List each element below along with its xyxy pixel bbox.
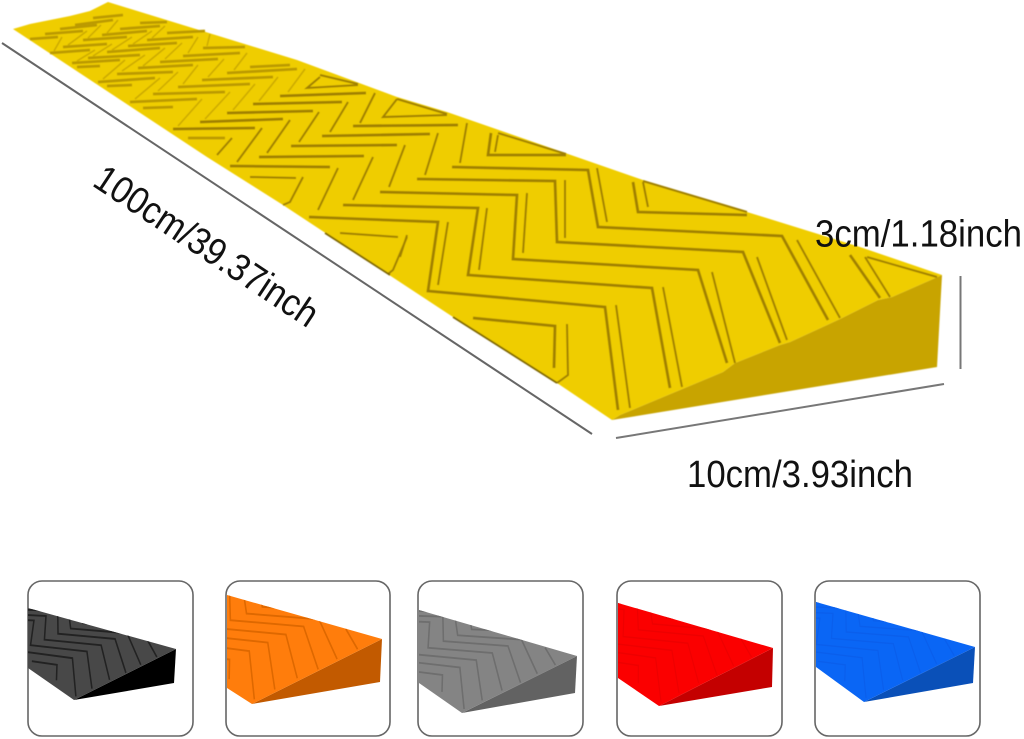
swatch: blue ramp (814, 580, 981, 737)
main yellow ramp (13, 2, 942, 420)
ramp top surface (13, 2, 942, 420)
height dimension line (960, 276, 962, 369)
ramp side face (612, 275, 942, 420)
width label: 10cm/3.93inch (687, 454, 913, 496)
far-end horizontal grooves (30, 15, 297, 138)
near-end thin grooves and triangles (217, 75, 937, 408)
swatch: red ramp (616, 580, 783, 737)
swatch: black ramp (27, 580, 194, 737)
length dimension line (2, 43, 592, 434)
swatch: orange ramp (225, 580, 391, 737)
swatch: gray ramp (417, 580, 584, 737)
herringbone tread grooves (30, 15, 937, 410)
length label: 100cm/39.37inch (86, 157, 326, 336)
width dimension line (616, 384, 944, 438)
far-end slanted grooves (54, 20, 305, 126)
